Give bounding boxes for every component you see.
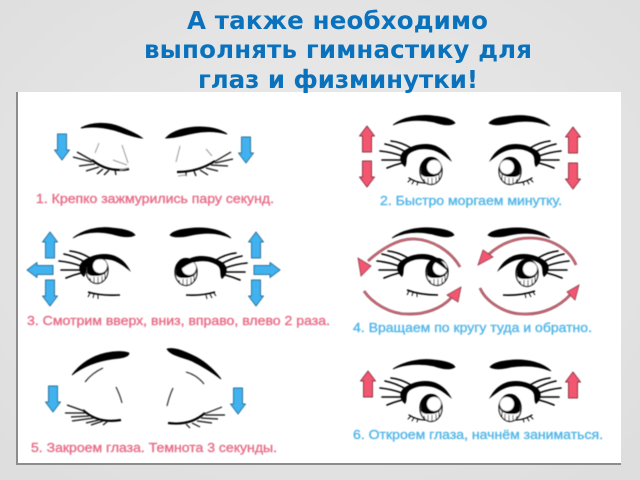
icon: open eyes with brows bbox=[380, 359, 561, 422]
arrow: left eye bottom arc bbox=[364, 287, 461, 314]
caption 4: 4. Вращаем по кругу туда и обратно. bbox=[353, 320, 592, 335]
caption 3: 3. Смотрим вверх, вниз, вправо, влево 2 раза. bbox=[27, 313, 330, 328]
arrow: down right bbox=[248, 280, 264, 306]
icon: closed eyes with high brows bbox=[65, 349, 225, 428]
arrow: left up bbox=[360, 126, 374, 152]
arrow: right down bbox=[230, 388, 246, 414]
exercise 2: blink quickly bbox=[360, 115, 580, 208]
icon: open eyes with brows bbox=[380, 115, 561, 185]
panel: white exercise sheet bbox=[16, 92, 621, 465]
arrow: right bbox=[254, 262, 280, 278]
icon: eyes looking left bbox=[59, 227, 247, 299]
title bbox=[144, 6, 532, 94]
arrow: right eye top arc bbox=[478, 238, 576, 265]
caption 2: 2. Быстро моргаем минутку. bbox=[380, 193, 562, 208]
arrow: left down bbox=[360, 161, 374, 187]
title: А также необходимо bbox=[187, 6, 488, 35]
exercise 5: close eyes, 3 seconds of darkness bbox=[31, 349, 277, 455]
caption 1: 1. Крепко зажмурились пару секунд. bbox=[36, 191, 274, 206]
arrow: right up bbox=[566, 372, 580, 398]
arrow: down left bbox=[42, 280, 58, 306]
arrow: right up bbox=[566, 127, 580, 153]
exercise 4: rotate eyes in a circle bbox=[353, 228, 592, 335]
arrow: left bbox=[27, 262, 53, 278]
arrow: left up bbox=[360, 371, 376, 397]
title: выполнять гимнастику для bbox=[144, 35, 532, 64]
icon: eyes with brows bbox=[377, 228, 569, 298]
arrow: right eye bottom arc bbox=[480, 285, 579, 314]
icon: closed eyes with brows bbox=[73, 123, 233, 176]
caption 5: 5. Закроем глаза. Темнота 3 секунды. bbox=[31, 440, 277, 455]
title: глаз и физминутки! bbox=[198, 65, 478, 94]
exercise 3: look up, down, right, left bbox=[27, 227, 330, 328]
exercise 6: open eyes, begin studying bbox=[353, 359, 603, 442]
arrow: left down bbox=[46, 386, 60, 412]
caption 6: 6. Откроем глаза, начнём заниматься. bbox=[353, 427, 603, 442]
arrow: right down bbox=[566, 163, 580, 189]
arrow: up right bbox=[248, 232, 264, 258]
arrow: up left bbox=[42, 232, 58, 258]
arrow: left down bbox=[54, 134, 70, 160]
exercise 1: squeeze eyes shut bbox=[36, 123, 274, 206]
arrow: left eye top arc bbox=[358, 239, 460, 276]
arrow: right down bbox=[238, 137, 254, 163]
